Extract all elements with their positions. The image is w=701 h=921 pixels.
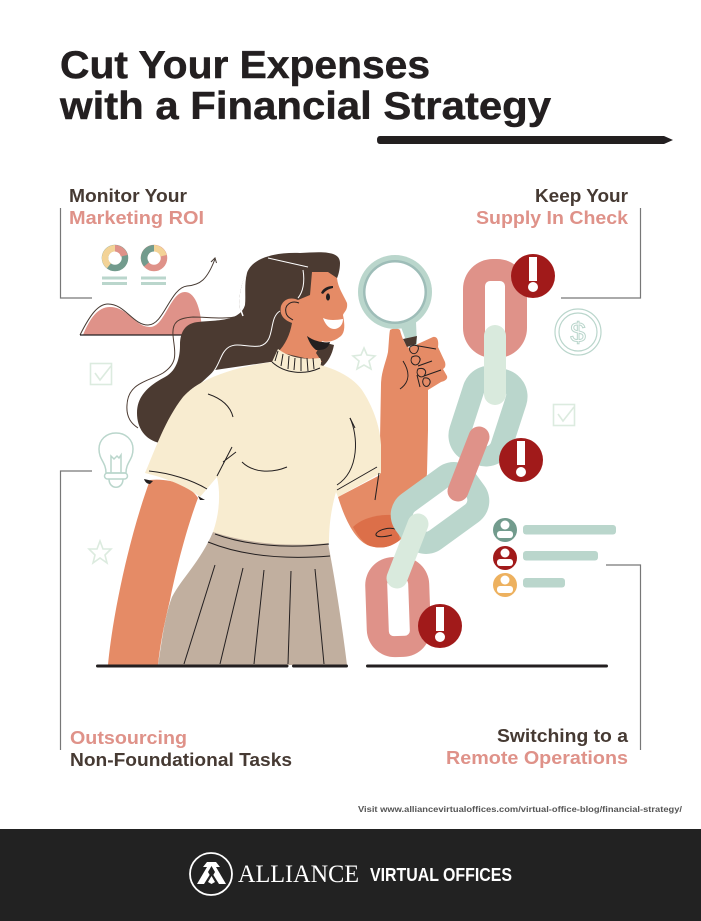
icon: star middle — [353, 348, 375, 369]
heading: keep your supply in check — [476, 186, 629, 228]
heading: outsourcing non-foundational tasks — [70, 728, 292, 770]
heading: monitor your marketing ROI — [69, 186, 204, 228]
alert bottom — [418, 604, 462, 648]
elbow shade — [353, 515, 400, 548]
bottom chain link — [364, 556, 432, 658]
hair — [137, 252, 340, 443]
heading: switching to remote operations: Switching to a — [497, 726, 629, 746]
elbow crease — [376, 528, 397, 537]
logo wordmark: ALLIANCE — [238, 861, 359, 888]
icon: check box left — [90, 364, 112, 384]
pink connector — [458, 437, 479, 491]
smile — [323, 318, 343, 329]
heading: switching to remote operations: Remote Operations — [446, 748, 628, 768]
upper connector — [484, 336, 506, 394]
heading: outsourcing non-foundational tasks: Outsourcing — [70, 728, 187, 748]
top chain link — [463, 259, 527, 358]
icon: dollar coin — [555, 309, 601, 355]
title: Cut Your Expenses — [60, 44, 430, 87]
icon: dollar coin: $ — [570, 317, 586, 348]
icon: donut charts — [102, 245, 167, 285]
heading: keep your supply in check: Keep Your — [535, 186, 628, 206]
heading: keep your supply in check: Supply In Check — [476, 208, 629, 228]
heading: outsourcing non-foundational tasks: Non-Foundational Tasks — [70, 750, 292, 770]
sweater — [145, 362, 381, 545]
right arm and hand — [338, 328, 447, 548]
title: with a Financial Strategy — [59, 85, 551, 128]
connector frames — [60, 208, 640, 750]
person green — [493, 518, 517, 542]
magnifying glass — [358, 255, 432, 347]
heading: switching to remote operations — [446, 726, 629, 768]
alert top — [511, 254, 555, 298]
hair outline strand — [127, 277, 245, 428]
collar — [272, 349, 321, 372]
sleeve and sweater lines — [149, 394, 379, 500]
woman illustration — [108, 252, 447, 665]
chart: marketing area with arrow — [80, 258, 216, 335]
alert middle — [499, 438, 543, 482]
third chain link — [380, 452, 500, 564]
fingers — [400, 345, 441, 389]
ear line — [286, 302, 299, 320]
lower connector — [397, 524, 418, 578]
footer band — [0, 829, 701, 921]
title — [59, 44, 551, 128]
ground lines — [98, 664, 606, 668]
logo mark — [190, 853, 232, 895]
source link: Visit www.alliancevirtualoffices.com/virtual-office-blog/financial-strategy/ — [358, 804, 683, 814]
second chain link — [441, 358, 535, 474]
logo tagline: VIRTUAL OFFICES — [370, 865, 512, 885]
skirt pleats — [184, 534, 330, 664]
icon: check box right — [554, 404, 574, 426]
chain — [364, 259, 535, 658]
person red — [493, 546, 517, 570]
sleeve cuff shadows — [144, 479, 205, 500]
people list — [493, 518, 616, 597]
icon: star left — [89, 541, 111, 563]
neck shadow — [307, 336, 330, 350]
title underline arrow — [377, 136, 673, 144]
icon: light bulb — [99, 433, 133, 487]
eye and brow — [321, 286, 333, 301]
person yellow — [493, 573, 517, 597]
hair highlights — [185, 258, 308, 403]
heading: monitor your marketing ROI: Marketing ROI — [69, 208, 204, 228]
neck and face — [278, 272, 347, 362]
left arm — [108, 480, 198, 665]
skirt — [158, 532, 347, 665]
heading: monitor your marketing ROI: Monitor Your — [69, 186, 187, 206]
